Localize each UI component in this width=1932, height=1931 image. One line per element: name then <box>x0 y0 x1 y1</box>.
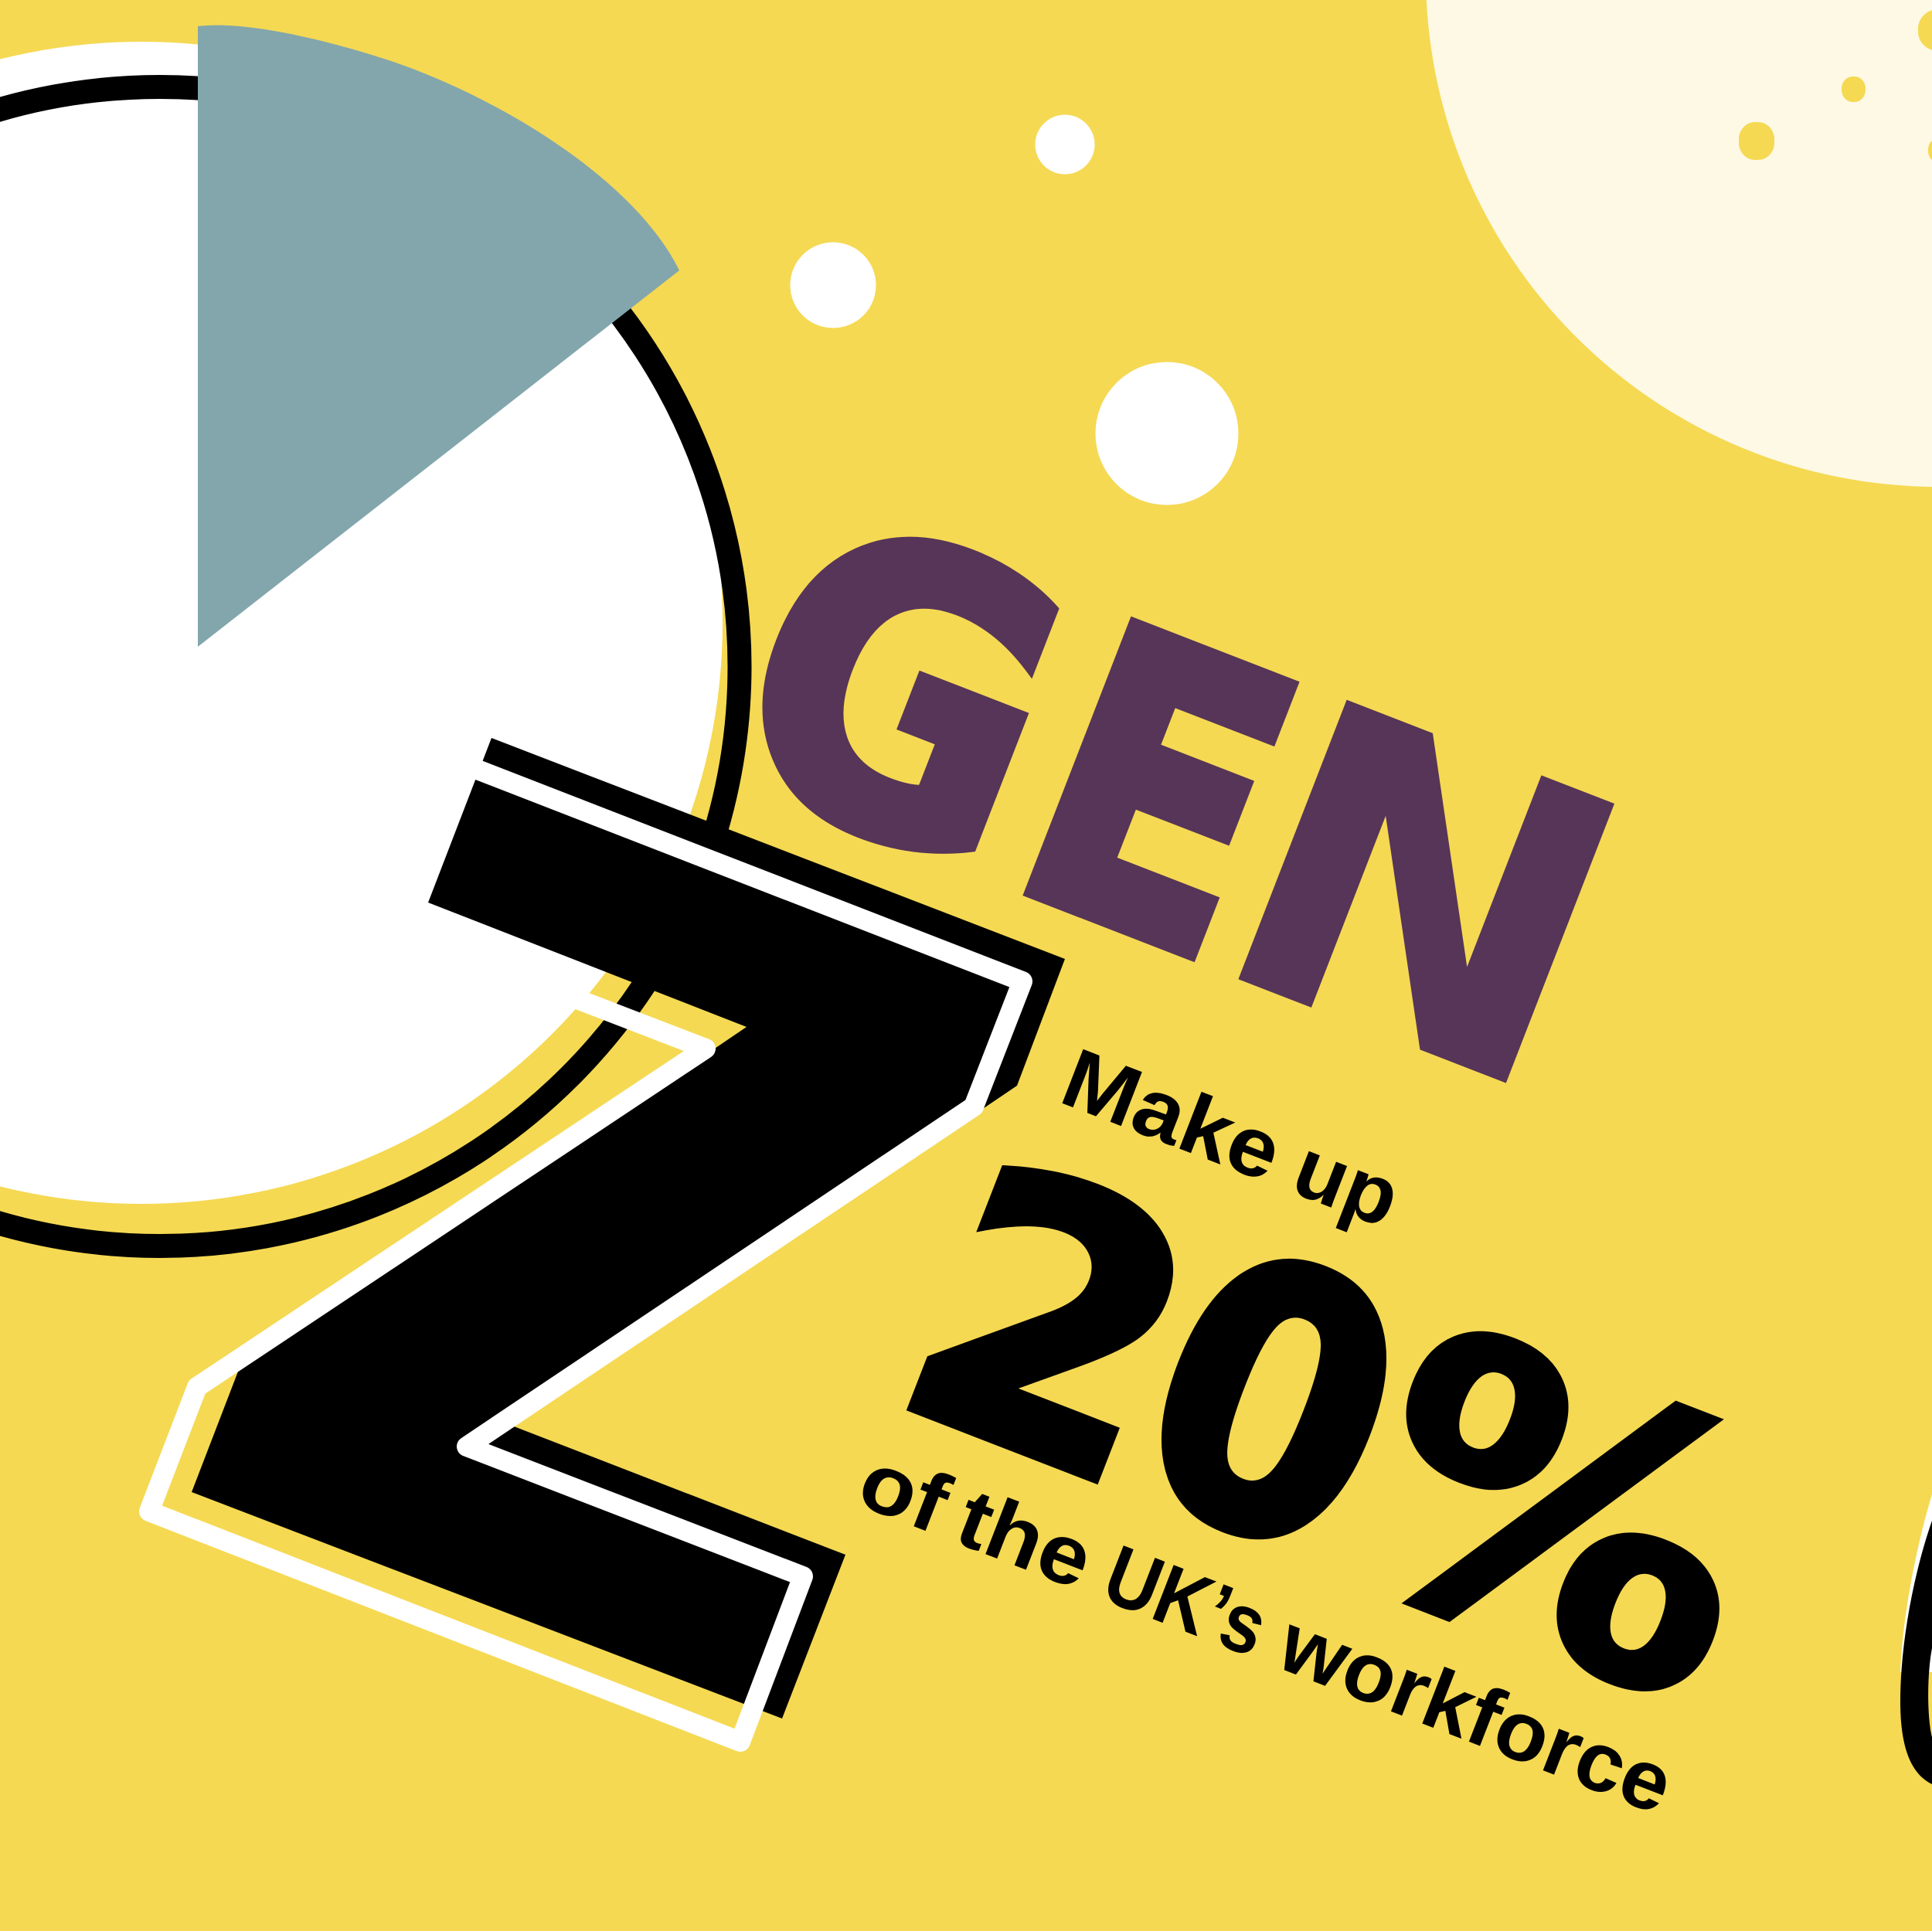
rotated text group <box>478 420 1932 1832</box>
big letter Z <box>149 738 1065 1742</box>
heading: GEN: G <box>680 430 1119 961</box>
heading: GEN: E <box>969 541 1346 1049</box>
statistic: 20%: % <box>1300 1246 1820 1790</box>
heading: GEN: N <box>1165 609 1682 1188</box>
statistic: 20% <box>855 1074 1820 1790</box>
statistic: 20%: 2 <box>855 1083 1246 1569</box>
text: Make up <box>1050 1030 1413 1246</box>
heading: GEN <box>676 420 1682 1188</box>
partial black shape at right edge <box>1900 1494 1932 1784</box>
text: Make up: up <box>1281 1120 1413 1246</box>
text: Make up: Make <box>1050 1030 1294 1200</box>
pie chart: white disc with black ring <box>0 42 740 1246</box>
text: of the UK's workforce: workforce <box>1266 1595 1685 1832</box>
statistic: 20%: 0 <box>1090 1168 1454 1644</box>
text: of the UK's workforce: of <box>847 1433 962 1552</box>
cream circle with dots, top right <box>1426 0 1932 487</box>
text: of the UK's workforce: the <box>944 1470 1106 1607</box>
pie slice: 20 percent segment <box>198 25 679 647</box>
white bubbles <box>790 114 1238 505</box>
text: of the UK's workforce: UK’s <box>1092 1528 1280 1675</box>
text: of the UK's workforce <box>847 1433 1685 1832</box>
